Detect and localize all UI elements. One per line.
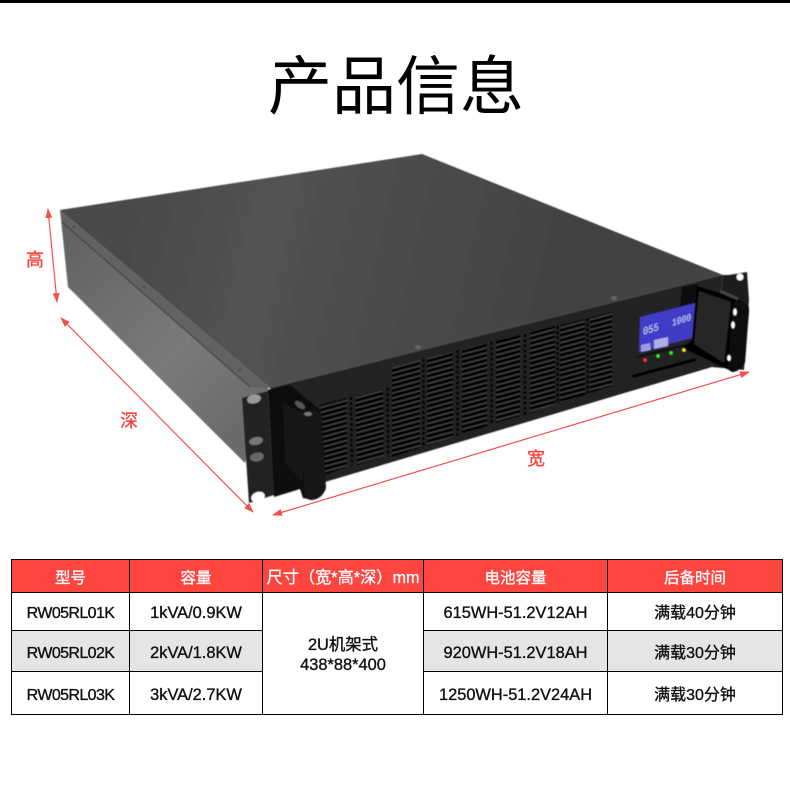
row: RW05RL01K: 满载40分钟 xyxy=(654,605,736,622)
row: RW05RL02K: 2kVA/1.8KW xyxy=(150,644,242,662)
left rack ear xyxy=(242,391,274,504)
row: RW05RL03K: 满载30分钟 xyxy=(654,686,736,704)
row: RW05RL01K: RW05RL01K xyxy=(27,605,114,622)
label: depth: 深 xyxy=(120,411,138,431)
product: rack UPS xyxy=(60,154,749,504)
row: RW05RL02K xyxy=(12,631,782,671)
LCD display: 055 xyxy=(643,322,659,339)
table header row: 2U机架式 xyxy=(308,636,378,654)
row: RW05RL03K: 1250WH-51.2V24AH xyxy=(439,686,592,704)
row: RW05RL03K: RW05RL03K xyxy=(27,686,114,704)
top black bar xyxy=(0,0,790,3)
table header row: 型号 xyxy=(55,570,86,586)
table header row: 电池容量 xyxy=(484,570,546,586)
table header row: 容量 xyxy=(180,570,212,586)
ventilation slots xyxy=(320,312,612,475)
LCD display xyxy=(639,303,695,352)
arrow: width xyxy=(273,372,749,515)
chassis front face xyxy=(270,275,723,482)
row: RW05RL01K: 1kVA/0.9KW xyxy=(150,604,242,622)
table header row xyxy=(12,560,782,704)
row: RW05RL01K xyxy=(27,604,736,674)
status LEDs and slot xyxy=(632,344,696,378)
table header row: 尺寸（宽*高*深）mm xyxy=(267,568,419,586)
LCD display: 1000 xyxy=(672,311,691,329)
title: 产品信息 xyxy=(268,51,524,123)
row: RW05RL03K xyxy=(27,686,736,704)
arrow: depth xyxy=(61,318,253,512)
table header row: 438*88*400 xyxy=(300,656,386,674)
right rack ear xyxy=(712,272,749,370)
row: RW05RL03K: 3kVA/2.7KW xyxy=(150,686,242,704)
right handle xyxy=(683,286,749,372)
row: RW05RL02K: 满载30分钟 xyxy=(654,644,736,662)
chassis top face xyxy=(60,154,723,388)
row: RW05RL02K: 920WH-51.2V18AH xyxy=(444,644,587,662)
arrow: height xyxy=(48,209,57,302)
label: width: 宽 xyxy=(527,449,545,469)
left handle xyxy=(268,385,326,500)
product illustration with dimension arrows xyxy=(26,153,750,516)
table header row: 后备时间 xyxy=(664,570,726,586)
label: height: 高 xyxy=(26,250,44,270)
chassis side face xyxy=(60,210,270,463)
row: RW05RL02K: RW05RL02K xyxy=(27,644,114,662)
row: RW05RL01K: 615WH-51.2V12AH xyxy=(444,604,587,622)
specification table xyxy=(11,559,783,715)
